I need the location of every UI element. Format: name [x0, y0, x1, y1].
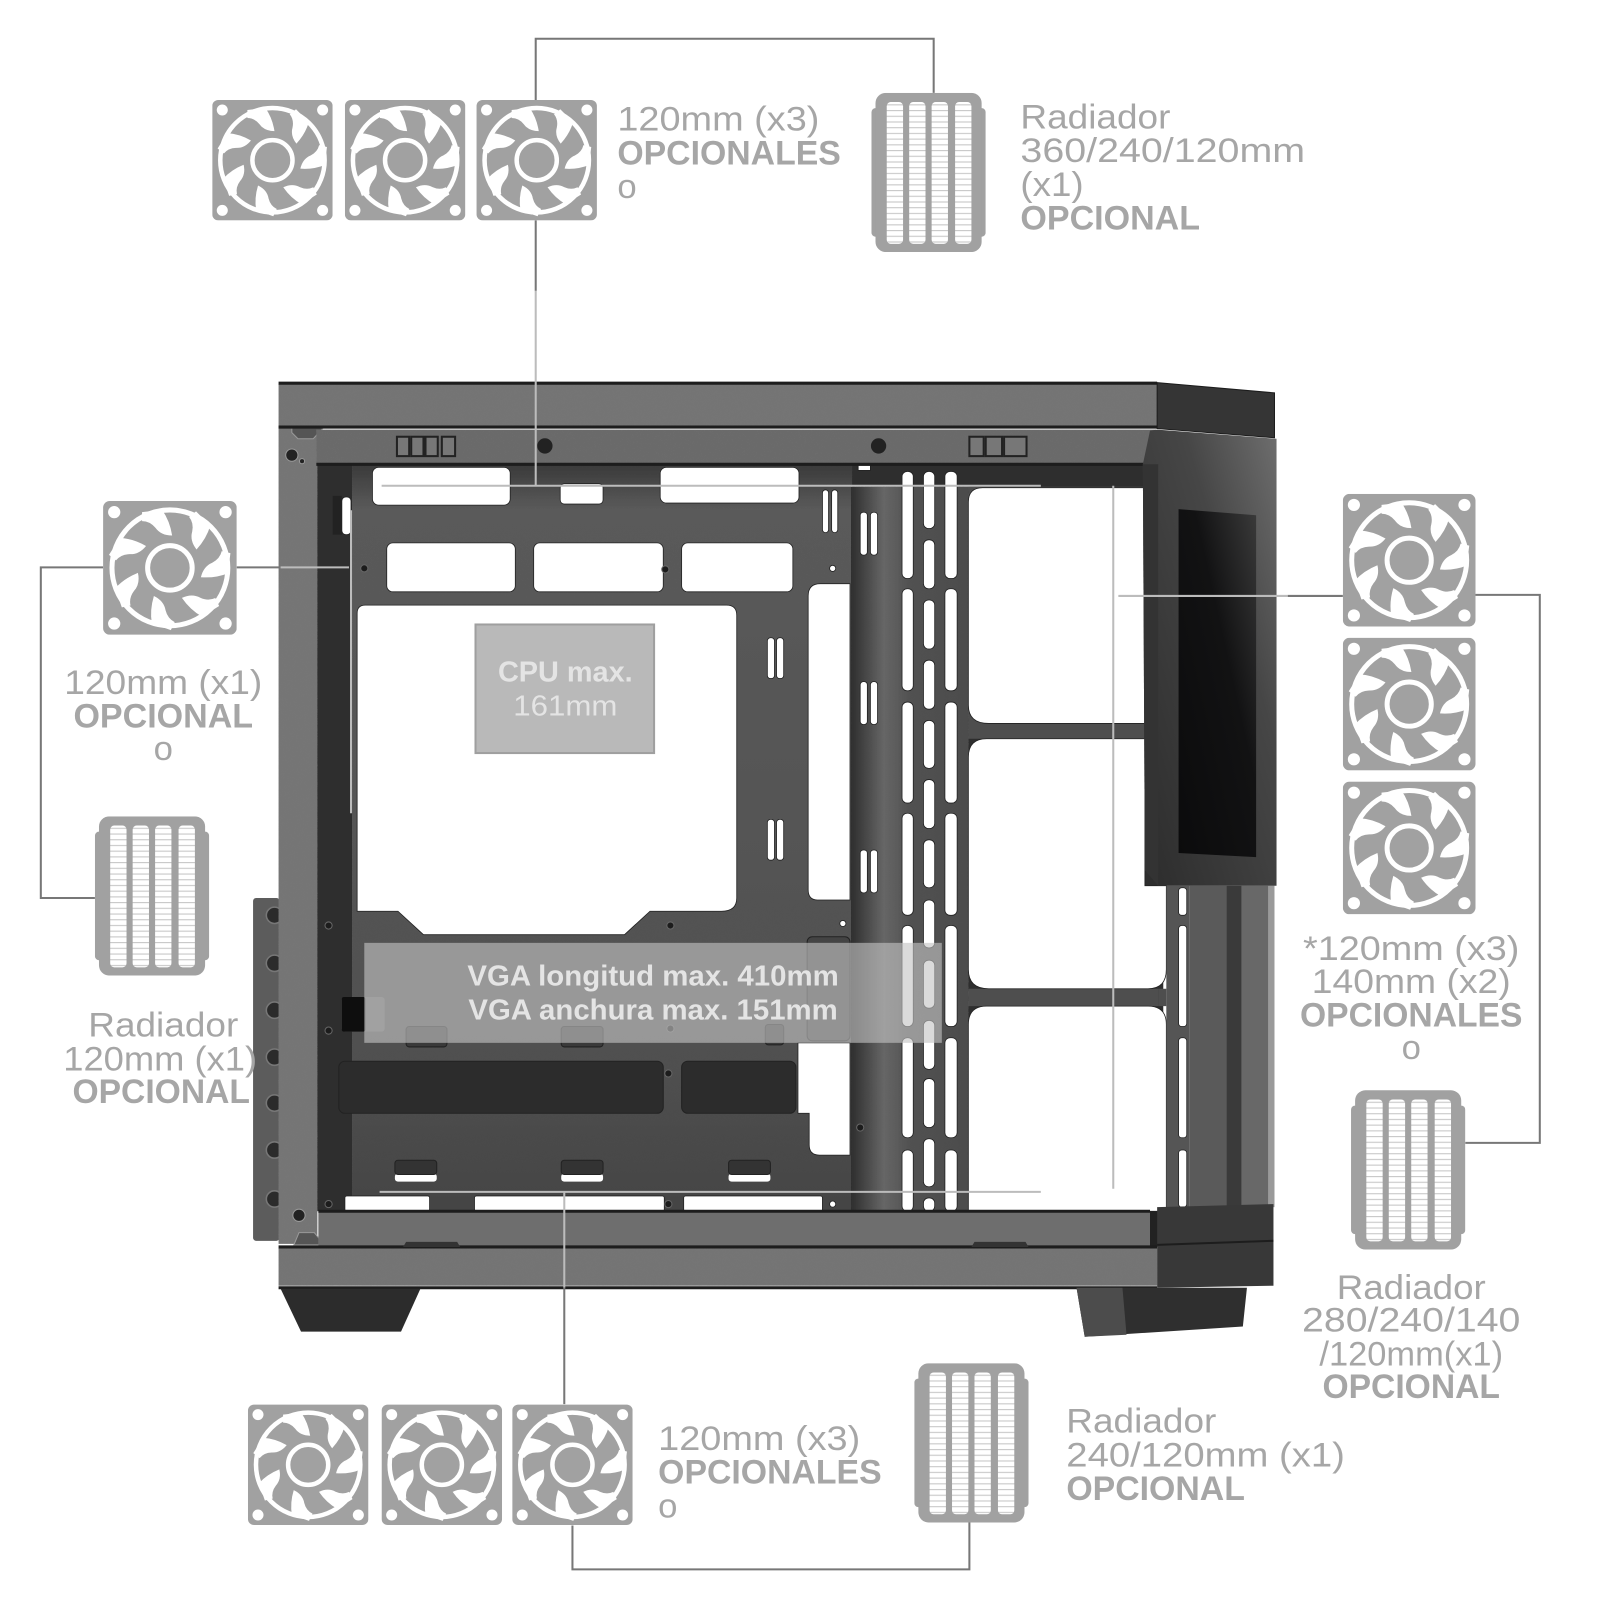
- front glass panel: [1143, 430, 1277, 886]
- CPU clearance box: CPU max.: [498, 657, 633, 689]
- bottom fans text: [658, 1420, 882, 1525]
- bottom fans text: OPCIONALES: [658, 1454, 882, 1492]
- guide lines: top: [382, 39, 1041, 486]
- right fans text: *120mm (x3): [1303, 930, 1519, 968]
- left radiator text: OPCIONAL: [72, 1073, 250, 1111]
- right foot: [1077, 1288, 1247, 1337]
- top inner band: [316, 430, 1156, 463]
- bottom inner band: [318, 1211, 1150, 1246]
- top radiator text: OPCIONAL: [1020, 200, 1200, 238]
- CPU clearance box: 161mm: [513, 690, 617, 722]
- large right openings: [968, 488, 1166, 1211]
- top fans text: 120mm (x3): [617, 101, 819, 139]
- bottom tray openings: [345, 1196, 822, 1211]
- left fan text: [64, 664, 262, 768]
- left radiator text: 120mm (x1): [63, 1040, 257, 1078]
- right radiator text: [1302, 1269, 1520, 1406]
- top screws and clips: [397, 437, 1027, 456]
- bottom outer band: [279, 1248, 1157, 1286]
- left foot: [281, 1289, 420, 1332]
- bottom radiator: [914, 1363, 1029, 1522]
- left radiator: [95, 816, 209, 976]
- CPU clearance box: [476, 624, 654, 753]
- bottom right corner: [1157, 1204, 1273, 1288]
- VGA clearance band: VGA longitud max. 410mm: [467, 961, 839, 993]
- right radiator text: Radiador: [1337, 1269, 1486, 1307]
- bottom radiator text: Radiador: [1066, 1403, 1216, 1441]
- back connector panel: [253, 898, 283, 1241]
- top tray openings: [333, 467, 838, 592]
- bottom radiator text: OPCIONAL: [1066, 1470, 1245, 1508]
- top radiator text: Radiador: [1020, 99, 1170, 137]
- front panel window: [1179, 509, 1256, 857]
- bottom radiator text: 240/120mm (x1): [1066, 1436, 1345, 1474]
- left fan text: OPCIONAL: [73, 698, 253, 736]
- top fans text: OPCIONALES: [617, 134, 841, 172]
- motherboard tray: [352, 464, 852, 1211]
- small tray holes: [830, 565, 846, 1207]
- right fans text: o: [1402, 1029, 1421, 1067]
- right tray slot: [808, 584, 850, 900]
- top fans text: o: [617, 168, 637, 206]
- right fans text: 140mm (x2): [1312, 963, 1511, 1001]
- bottom fans text: o: [658, 1487, 677, 1525]
- top outer band: [279, 384, 1157, 426]
- bottom fans text: 120mm (x3): [658, 1420, 860, 1458]
- top fans: [212, 100, 597, 220]
- left fan text: o: [154, 730, 173, 768]
- right fans text: OPCIONALES: [1300, 997, 1522, 1035]
- top fans text: [617, 101, 841, 206]
- left radiator text: Radiador: [88, 1007, 238, 1045]
- left fan text: 120mm (x1): [64, 664, 262, 702]
- bottom band gap: [1150, 1211, 1158, 1247]
- top radiator: [871, 93, 986, 252]
- bottom radiator text: [1066, 1403, 1345, 1508]
- right fans text: [1300, 930, 1522, 1067]
- lower tray opening: [798, 1043, 850, 1155]
- bottom fans: [248, 1405, 633, 1525]
- top right corner: [1157, 383, 1274, 438]
- right radiator text: /120mm(x1): [1319, 1335, 1503, 1373]
- overlay-side tray plate: [807, 937, 850, 1041]
- vertical rail: [851, 487, 968, 1211]
- left post: [279, 426, 317, 1244]
- guide lines: left: [41, 510, 351, 898]
- lower right section: [1158, 886, 1274, 1207]
- left radiator text: [63, 1007, 257, 1111]
- top radiator text: [1020, 99, 1305, 238]
- bottom band clips: [403, 1242, 1029, 1247]
- VGA clearance band: [364, 943, 942, 1043]
- left fan: [103, 501, 237, 635]
- guide lines: bottom: [380, 1192, 1041, 1569]
- main tray opening: [357, 605, 737, 935]
- top radiator text: 360/240/120mm: [1020, 132, 1305, 170]
- top radiator text: (x1): [1020, 166, 1084, 204]
- fan mount bars: [968, 487, 1158, 1006]
- top edge lines: [279, 383, 1157, 464]
- right radiator text: 280/240/140: [1302, 1302, 1520, 1340]
- bottom edge lines: [279, 1211, 1157, 1288]
- dark interior behind tray: [316, 461, 1163, 1211]
- lower dark cut-outs: [339, 1061, 796, 1113]
- tray screws: [325, 565, 864, 1208]
- guide lines: right: [1113, 486, 1540, 1189]
- tray tabs: [342, 997, 784, 1182]
- right fans: [1343, 494, 1476, 914]
- VGA clearance band: VGA anchura max. 151mm: [468, 994, 838, 1026]
- right radiator text: OPCIONAL: [1322, 1368, 1500, 1406]
- ventilation slots in rail: [902, 471, 957, 1211]
- right radiator: [1351, 1090, 1465, 1249]
- post screws and brackets: [286, 427, 324, 1245]
- PC case chassis: [253, 383, 1277, 1337]
- small tray slots: [767, 465, 878, 893]
- front panel inner edge: [1143, 464, 1158, 886]
